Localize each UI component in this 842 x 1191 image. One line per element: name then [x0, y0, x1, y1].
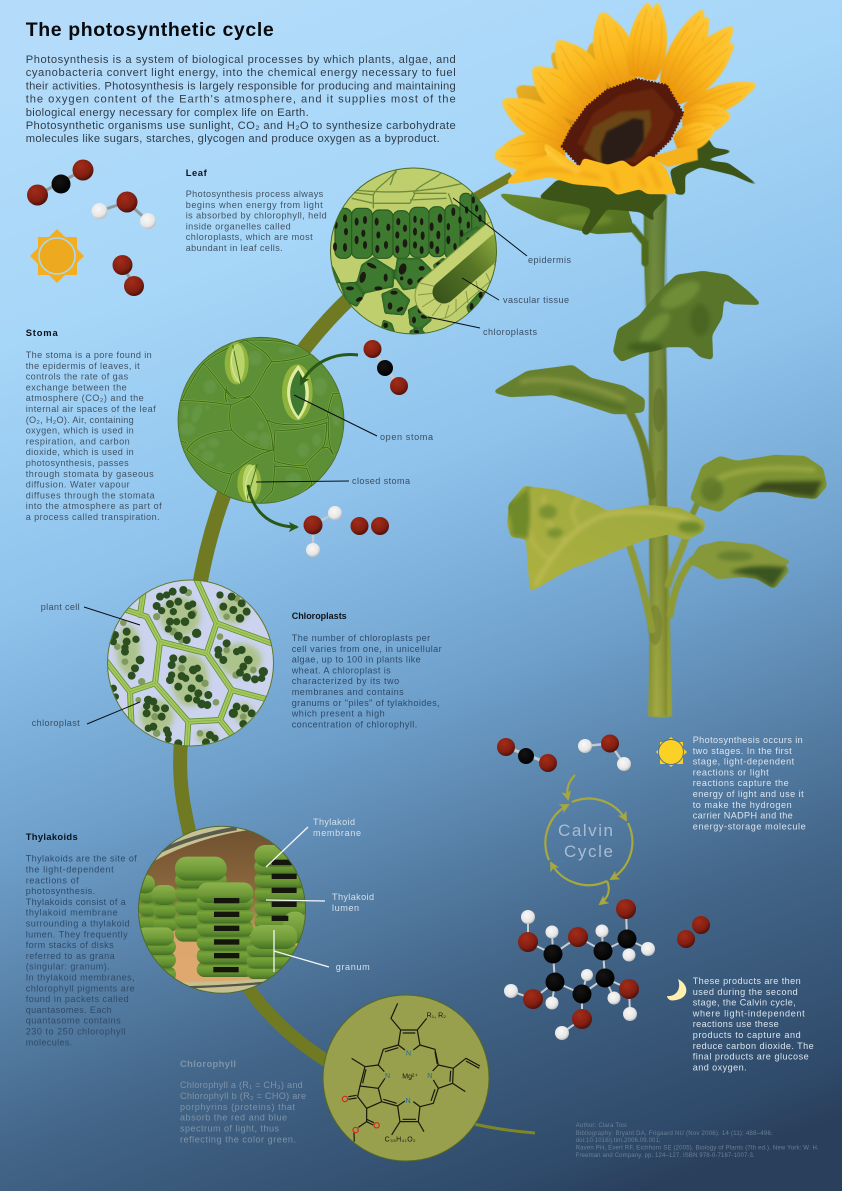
intro paragraph: molecules like sugars, starches, glycogen and produce oxygen as a byproduct.	[26, 133, 440, 145]
credits: Author: Clara Tosi	[576, 1123, 627, 1129]
icon: H2O molecule	[578, 734, 631, 771]
panel: thylakoids text: molecules.	[26, 1037, 72, 1047]
intro paragraph: Photosynthesis is a system of biological processes by which plants, algae, and	[26, 54, 456, 66]
panel: leaf cross-section circle	[328, 168, 571, 337]
arrow: CO2 into open stoma	[301, 354, 358, 384]
text: second stage: and oxygen.	[693, 1062, 747, 1072]
diagram: Calvin cycle: Cycle	[564, 842, 613, 861]
text: second stage	[692, 976, 814, 1072]
main stem	[644, 195, 672, 718]
vascular tissue	[418, 243, 499, 318]
panel: chlorophyll text: reflecting the color green.	[180, 1134, 296, 1144]
panel: thylakoid stacks circle	[130, 817, 374, 998]
icon: sun	[656, 737, 687, 767]
leaf: right lower	[688, 541, 794, 589]
label: thylakoid membrane: Thylakoid	[313, 817, 355, 827]
panel: stoma text	[26, 327, 162, 522]
icon: sun	[30, 229, 84, 283]
credits	[576, 1123, 819, 1159]
panel: chlorophyll text: porphyrins (proteins) that	[180, 1102, 295, 1112]
panel: stoma text: diffusion. Water vapour	[26, 480, 130, 490]
disc florets	[562, 79, 683, 170]
panel: thylakoids text: quantasome contains	[26, 1016, 121, 1026]
label: open stoma: open stoma	[380, 432, 434, 442]
panel: chlorophyll text: Chlorophyll b (R₂ = CHO) are	[180, 1091, 306, 1101]
panel: photosynthesis first stage	[497, 734, 806, 831]
label: chloroplasts: chloroplasts	[483, 327, 537, 337]
text: first stage: Photosynthesis occurs in	[693, 735, 803, 745]
icon: molecules and sun, top left	[27, 160, 156, 296]
icon: H2O molecule	[304, 506, 342, 557]
text: first stage: energy of light and use it	[693, 789, 804, 799]
text: second stage: where light-independent	[692, 1008, 805, 1018]
panel: chloroplasts text: cell varies from one, in unicellular	[292, 644, 442, 654]
panel: stoma text: Stoma	[26, 327, 58, 338]
label: thylakoid membrane: membrane	[313, 828, 361, 838]
icon: O2 molecule	[677, 916, 710, 948]
panel: thylakoids text: Thylakoids are the site of	[26, 854, 137, 864]
illustration: sunflower plant	[492, 1, 827, 717]
label: vascular tissue: vascular tissue	[503, 295, 569, 305]
label: closed stoma: closed stoma	[352, 476, 411, 486]
panel: thylakoids text: quantasomes. Each	[26, 1005, 112, 1015]
panel: stoma text: atmosphere (CO₂) and the	[26, 393, 144, 403]
label: thylakoid membrane	[313, 817, 361, 838]
panel: chloroplasts text: algae, up to 100 in plants like	[292, 655, 421, 665]
panel: chloroplasts text: concentration of chlorophyll.	[292, 719, 417, 729]
panel: chloroplasts text: The number of chloroplasts per	[292, 633, 430, 643]
panel: leaf text: inside organelles called	[186, 221, 291, 231]
credits: Bibliography: Bryant DA, Frigaard NU (Nov 2006). 14 (11): 488–496.	[576, 1131, 773, 1137]
panel: thylakoids text: Thylakoids	[26, 831, 78, 842]
panel: stoma text: controls the rate of gas	[26, 372, 129, 382]
diagram: Calvin cycle	[545, 775, 632, 904]
panel: chlorophyll text: absorb the red and blue	[180, 1113, 287, 1123]
panel: stoma text: internal air spaces of the leaf	[26, 404, 156, 414]
diagram: Calvin cycle: Calvin	[558, 821, 613, 840]
panel: chlorophyll text: spectrum of light, thus	[180, 1124, 279, 1134]
icon: closed stoma top	[225, 342, 249, 385]
intro paragraph: biological energy necessary for complex life on Earth.	[26, 107, 309, 119]
leaf: upper large	[613, 271, 762, 362]
text: first stage: to make the hydrogen	[693, 800, 792, 810]
label: thylakoid lumen: lumen	[332, 903, 359, 913]
panel: stoma text: into the atmosphere as part of	[26, 501, 162, 511]
panel: stoma circle	[175, 337, 434, 557]
panel: leaf text: is absorbed by chlorophyll, held	[186, 211, 327, 221]
text: second stage: used during the second	[693, 987, 798, 997]
icon: CO2 molecule	[364, 340, 408, 395]
text: first stage: reactions or light	[693, 767, 769, 777]
panel: thylakoids text: form stacks of disks	[26, 940, 114, 950]
panel: stoma text: exchange between the	[26, 382, 127, 392]
panel: stoma text: a process called transpiration.	[26, 512, 160, 522]
label: R groups: R₁, R₂	[427, 1012, 446, 1019]
panel: chloroplasts text: characterized by its two	[292, 676, 399, 686]
panel: stoma text: dioxide, which is used in	[26, 447, 134, 457]
panel: thylakoids text: chlorophyll pigments are	[26, 983, 135, 993]
label lines: chloroplast circle	[84, 607, 140, 724]
label: nitrogen atoms: N	[406, 1098, 411, 1105]
petals: main ring	[493, 1, 760, 174]
label lines: stoma	[256, 395, 377, 482]
panel: leaf text: abundant in leaf cells.	[186, 243, 283, 253]
label: thylakoid lumen	[332, 892, 374, 913]
panel: thylakoids text: 230 to 250 chlorophyll	[26, 1026, 126, 1036]
label: nitrogen atoms	[385, 1050, 432, 1105]
panel: thylakoids text: (singular: granum).	[26, 962, 110, 972]
panel: stoma text: through stomata by gaseous	[26, 469, 154, 479]
icon: closed stoma bottom	[237, 464, 261, 503]
text: first stage: reactions capture the	[693, 778, 789, 788]
panel: chloroplast cells circle	[32, 580, 274, 750]
label: nitrogen atoms: N	[406, 1050, 411, 1057]
panel: stoma text: respiration, and carbon	[26, 436, 130, 446]
intro paragraph: cyanobacteria convert light energy, into the chemical energy necessary to fuel	[26, 67, 456, 79]
label: plant cell: plant cell	[41, 602, 80, 612]
icon: O2 molecule	[350, 517, 389, 535]
stalks	[630, 227, 698, 630]
arrow: gases out of closed stoma	[248, 485, 297, 527]
panel: thylakoids text: photosynthesis.	[26, 886, 95, 896]
icon: glucose molecule	[504, 899, 655, 1040]
text: first stage: energy-storage molecule	[693, 821, 806, 831]
panel: leaf text	[186, 167, 327, 253]
panel: stoma text: diffuses through the stomata	[26, 490, 156, 500]
leaf: below flower left	[497, 193, 635, 234]
panel: chloroplasts text: membranes and contains	[292, 687, 404, 697]
text: second stage: reduce carbon dioxide. The	[693, 1041, 814, 1051]
text: first stage: two stages. In the first	[693, 746, 792, 756]
title: The photosynthetic cycle	[26, 19, 274, 41]
icon: CO2 molecule	[497, 738, 557, 772]
leaf: right upper	[690, 455, 827, 512]
petals: front	[505, 140, 677, 195]
arc: stem connecting circles	[180, 176, 535, 1133]
panel: thylakoids text: referred to as grana	[26, 951, 116, 961]
text: second stage: products to capture and	[693, 1030, 801, 1040]
panel: thylakoids text	[26, 831, 137, 1047]
intro paragraph	[26, 54, 456, 145]
panel: chloroplasts text	[291, 611, 442, 729]
intro paragraph: the oxygen content of the Earth's atmosphere, and it supplies most of the	[26, 94, 456, 106]
intro paragraph: their activities. Photosynthesis is largely responsible for producing and maintaining	[26, 80, 456, 92]
panel: leaf text: Photosynthesis process always	[186, 189, 324, 199]
panel: stoma text: photosynthesis, passes	[26, 458, 129, 468]
panel: stoma text: The stoma is a pore found in	[26, 350, 152, 360]
text: first stage	[693, 735, 806, 831]
stacks: thylakoid grana	[135, 845, 308, 982]
label: granum: granum	[336, 962, 370, 972]
petals: back	[507, 37, 625, 144]
credits: doi:10.1016/j.tim.2006.09.001;	[576, 1138, 661, 1144]
label: epidermis: epidermis	[528, 255, 571, 265]
panel: thylakoids text: In thylakoid membranes,	[26, 972, 135, 982]
sunflower head	[493, 1, 760, 195]
panel: chloroplasts text: granums or "piles" of tylakhoides,	[292, 698, 440, 708]
text: second stage: final products are glucose	[693, 1052, 809, 1062]
text: second stage: reactions use these	[693, 1019, 779, 1029]
intro paragraph: Photosynthetic organisms use sunlight, CO₂ and H₂O to synthesize carbohydrate	[26, 120, 456, 132]
label lines: thylakoid	[266, 827, 329, 972]
panel: stoma text: the epidermis of leaves, it	[26, 361, 140, 371]
text: second stage: These products are then	[693, 976, 801, 986]
label: chloroplast: chloroplast	[32, 718, 80, 728]
text: first stage: stage, light-dependent	[693, 757, 795, 767]
panel: thylakoids text: thylakoid membrane	[26, 908, 118, 918]
label: magnesium: Mg²⁺	[402, 1074, 418, 1081]
label: nitrogen atoms: N	[385, 1073, 390, 1080]
sepals	[538, 138, 766, 236]
text: first stage: carrier NADPH and the	[693, 811, 793, 821]
panel: thylakoids text: lumen. They frequently	[26, 929, 128, 939]
label: phytyl formula: C₃₅H₄₁O₂	[385, 1137, 416, 1144]
label lines: leaf	[428, 198, 527, 328]
panel: stoma text: oxygen, which is used in	[26, 426, 134, 436]
panel: photosynthesis second stage	[667, 976, 814, 1072]
panel: chloroplasts text: which present a high	[291, 709, 385, 719]
panel: chlorophyll text: Chlorophyll	[180, 1058, 236, 1069]
credits: Freeman and Company. pp. 124–127. ISBN 978-0-7167-1007-3.	[576, 1153, 755, 1159]
label: nitrogen atoms: N	[427, 1073, 432, 1080]
panel: thylakoids text: Thylakoids consist of a	[26, 897, 127, 907]
panel: leaf text: Leaf	[186, 167, 208, 178]
panel: chlorophyll molecule circle	[323, 995, 489, 1161]
panel: thylakoids text: the light-dependent	[26, 864, 114, 874]
icon: moon	[667, 979, 686, 1000]
text: second stage: stage, the Calvin cycle,	[693, 998, 796, 1008]
icon: open stoma	[282, 364, 313, 420]
panel: leaf text: chloroplasts, which are most	[186, 232, 313, 242]
panel: leaf text: begins when energy from light	[186, 200, 323, 210]
panel: thylakoids text: surrounding a thylakoid	[26, 918, 130, 928]
panel: chloroplasts text: Chloroplasts	[292, 611, 347, 621]
label: thylakoid lumen: Thylakoid	[332, 892, 374, 902]
panel: thylakoids text: found in packets called	[26, 994, 129, 1004]
panel: stoma text: (O₂, H₂O). Air, containing	[26, 415, 134, 425]
panel: chloroplasts text: wheat. A chloroplast is	[291, 665, 391, 675]
panel: chlorophyll text	[180, 1058, 306, 1144]
panel: thylakoids text: reactions of	[26, 875, 79, 885]
credits: Raven PH, Evert RF, Eichhorn SE (2005). Biology of Plants (7th ed.). New York: W. H.	[576, 1146, 819, 1152]
leaf: large front	[507, 486, 705, 592]
leaf: left middle	[492, 365, 645, 414]
panel: chlorophyll text: Chlorophyll a (R₁ = CH₃) and	[180, 1080, 303, 1090]
